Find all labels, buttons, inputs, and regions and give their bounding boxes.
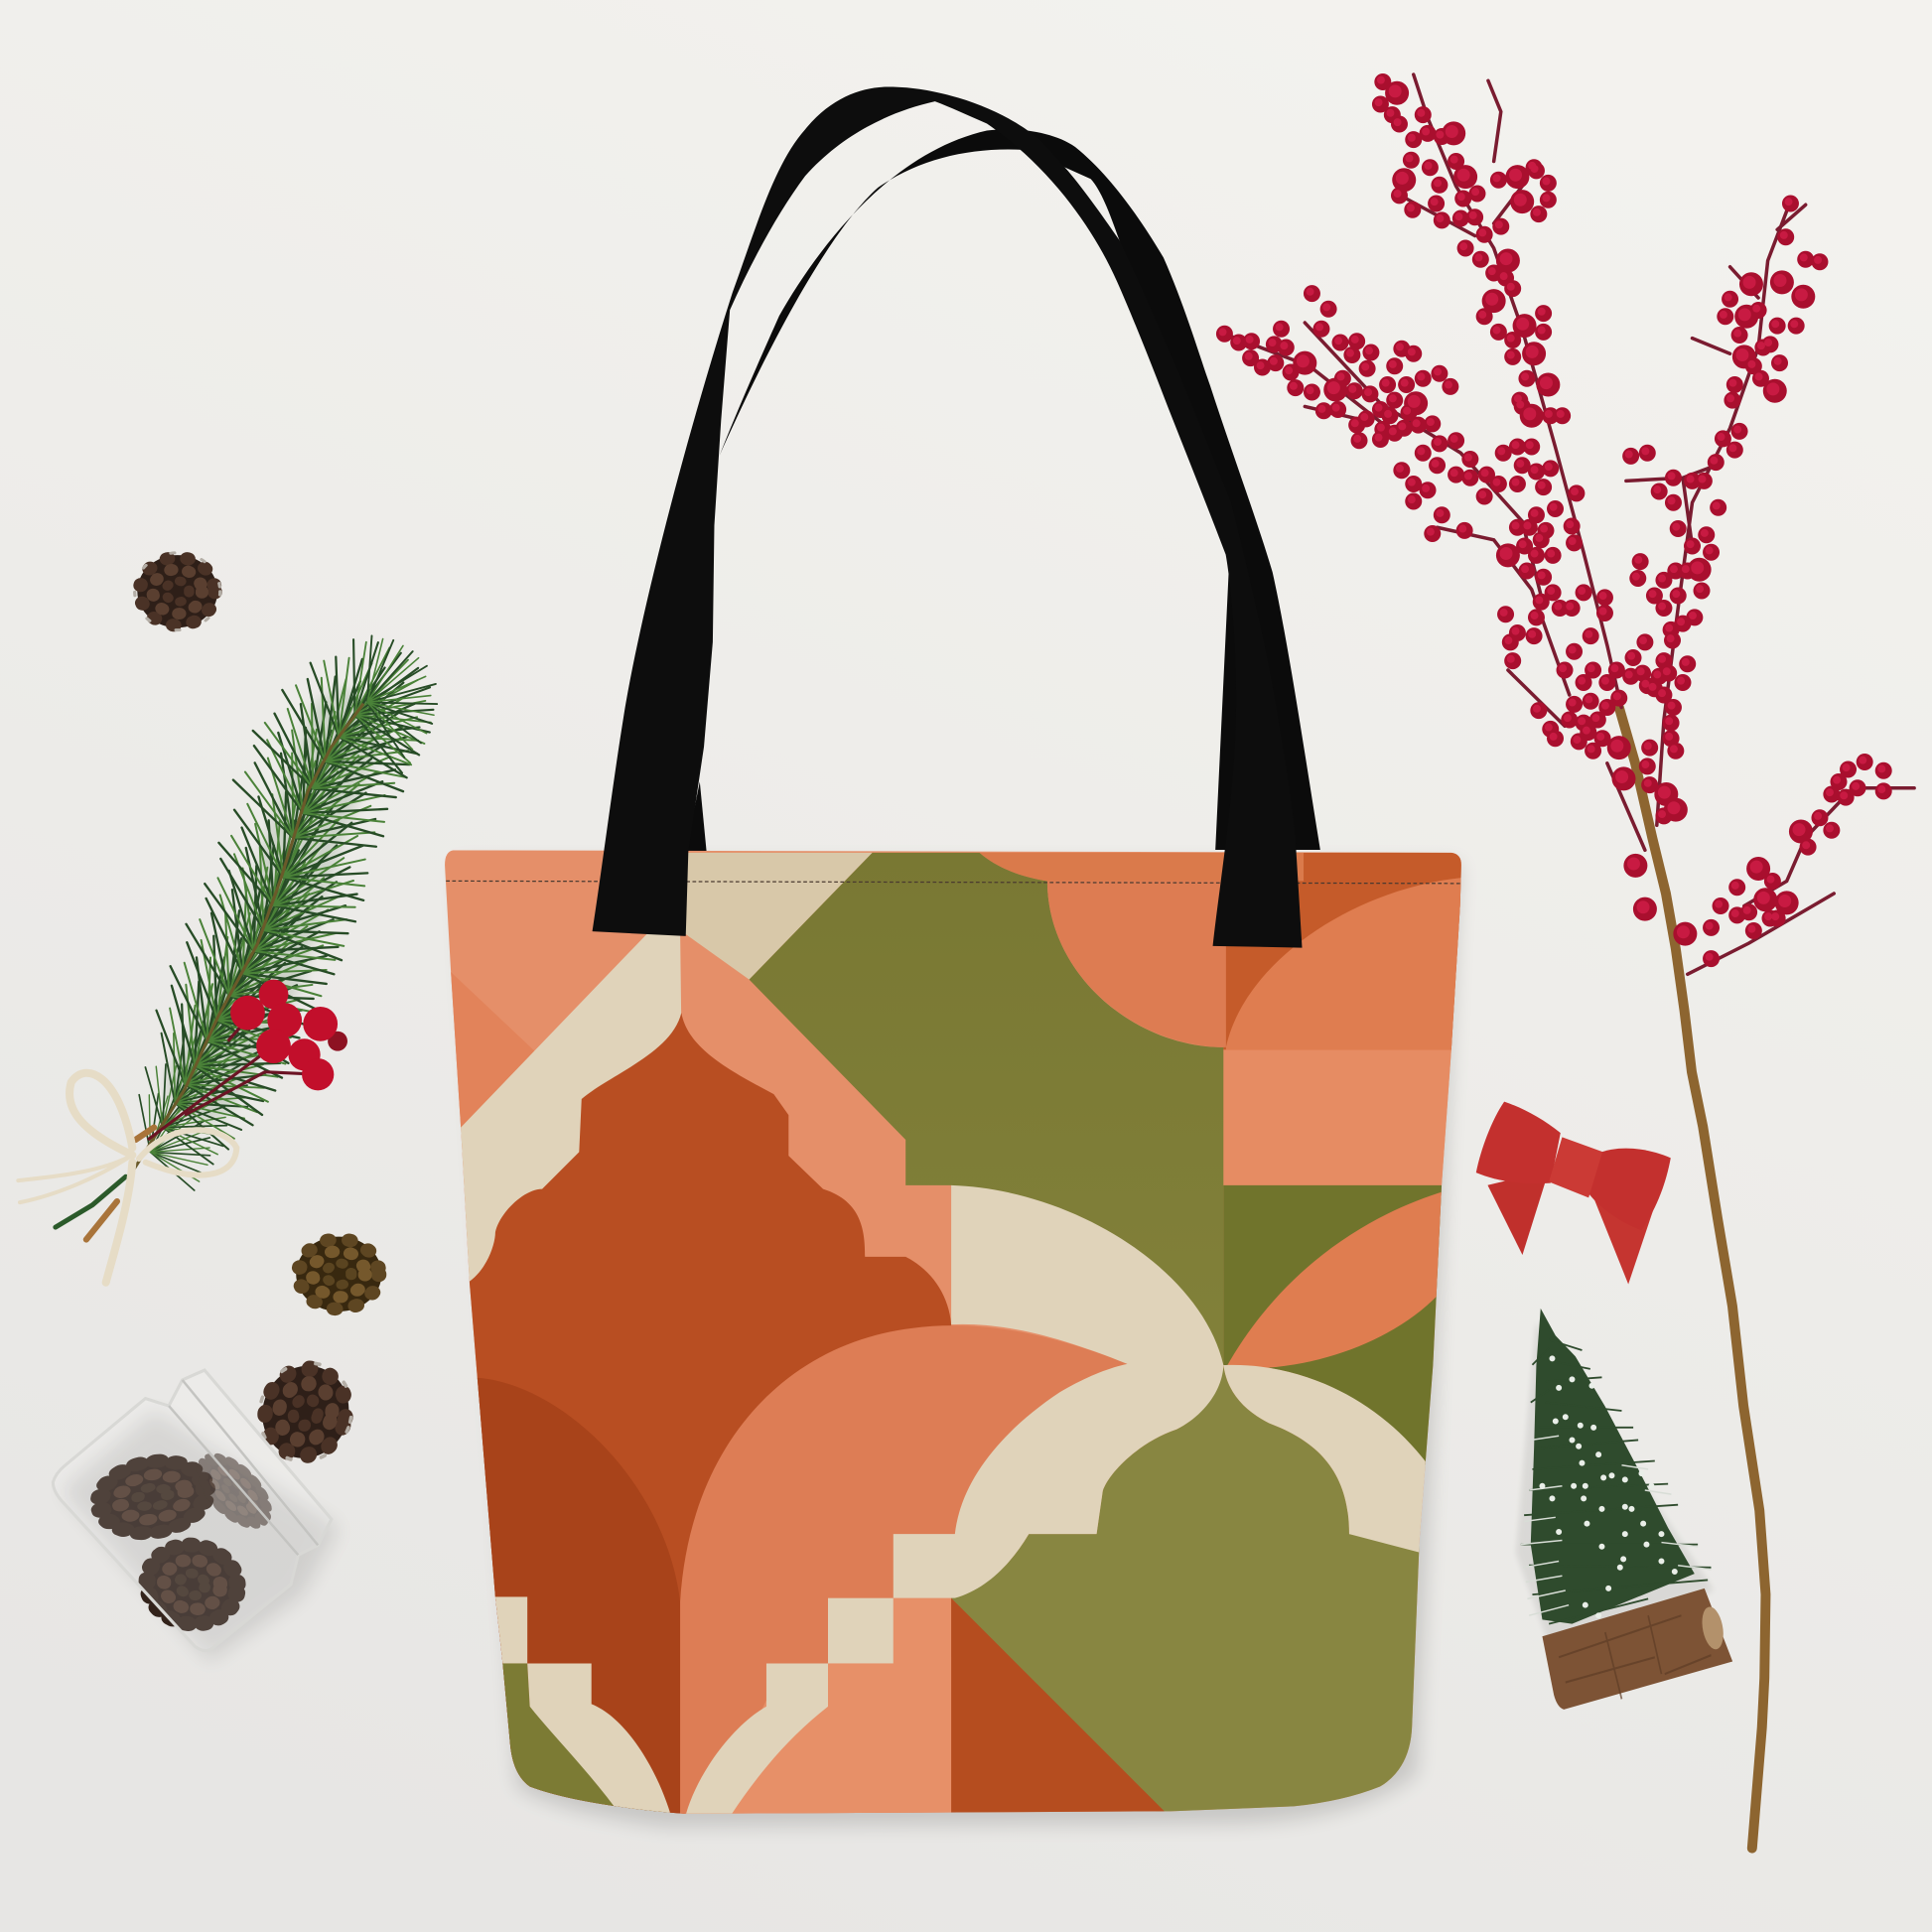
bottle brush tree: [1516, 1309, 1732, 1710]
branch main stem: [1619, 707, 1765, 1849]
tree shadow: [1516, 1323, 1715, 1645]
rust tufts: [86, 1128, 154, 1240]
bag shadow: [456, 863, 1460, 1826]
cones inside jar: [94, 1452, 211, 1541]
berry branch: [1223, 74, 1914, 1849]
red ribbon bow: [1476, 1102, 1671, 1284]
tree foliage: [1531, 1309, 1695, 1624]
green bristles: [1521, 1339, 1711, 1624]
tote bag: [431, 87, 1478, 1836]
twigs and berries: [1223, 74, 1914, 974]
soft foliage mass: [204, 727, 345, 1084]
pine cone: by jar: [246, 1350, 365, 1474]
pine sprig with berries and twine: [18, 621, 454, 1283]
pine cone: top: [135, 553, 220, 630]
jar glass: [53, 1370, 332, 1651]
jar neck: [169, 1380, 318, 1555]
jar shadow: [62, 1411, 339, 1661]
needles: [123, 621, 454, 1200]
pine cone: golden: [296, 1237, 381, 1311]
stump cut end: [1699, 1603, 1726, 1652]
sprig stem: [133, 704, 363, 1171]
rear handle strap: [686, 129, 1320, 852]
lower stem: [56, 1176, 126, 1227]
snow flecks: [1542, 1358, 1675, 1615]
white bristle tips: [1521, 1436, 1711, 1615]
front handle strap: [593, 87, 1303, 948]
red berries: [230, 980, 347, 1090]
glass jar with cones: [53, 1370, 339, 1661]
bag body pattern: [431, 844, 1478, 1836]
red berry stems: [148, 1013, 318, 1140]
bark texture: [1559, 1615, 1711, 1699]
twine bow: [18, 1073, 236, 1283]
wood stump: [1542, 1588, 1732, 1710]
